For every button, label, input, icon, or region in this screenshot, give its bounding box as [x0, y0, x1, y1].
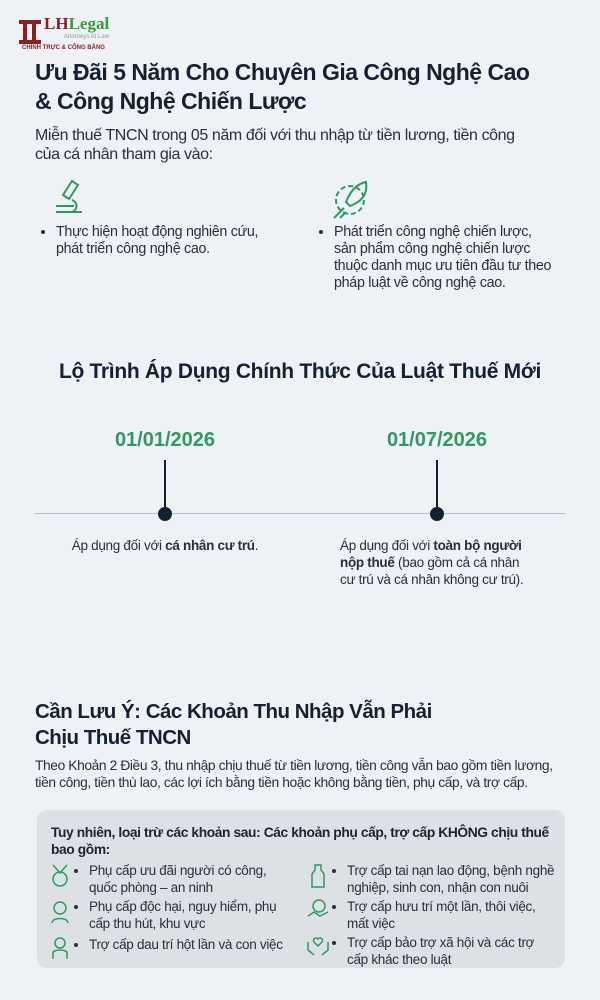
icon: microscope: [56, 180, 82, 213]
right list: nghiệp, sinh con, nhận con nuôi: [347, 880, 528, 895]
intro text: Miễn thuế TNCN trong 05 năm đối với thu nhập từ tiền lương, tiền công: [35, 127, 515, 144]
note 2: Áp dụng đối với toàn bộ người: [340, 538, 522, 553]
left list: cấp thu hút, khu vực: [89, 916, 205, 931]
right list: Trợ cấp tai nạn lao động, bệnh nghề: [347, 863, 554, 878]
section heading: Cần Lưu Ý: Các Khoản Thu Nhập Vẫn Phải: [35, 700, 432, 723]
section text: Theo Khoản 2 Điều 3, thu nhập chịu thuế từ tiền lương, tiền công vẫn bao gồm tiền lương,: [35, 758, 553, 773]
note 1: Áp dụng đối với cá nhân cư trú.: [72, 538, 258, 553]
item 2: [319, 224, 551, 291]
left list: Phụ cấp độc hại, nguy hiểm, phụ: [89, 899, 276, 914]
item 2: Phát triển công nghệ chiến lược,: [334, 224, 532, 240]
right list: Trợ cấp bảo trợ xã hội và các trợ: [347, 935, 534, 950]
item 2: thuộc danh mục ưu tiên đầu tư theo: [334, 258, 551, 274]
item 1: [41, 224, 258, 257]
date 1: 01/01/2026: [115, 429, 215, 451]
intro text: của cá nhân tham gia vào:: [35, 146, 213, 163]
item 1: phát triển công nghệ cao.: [56, 241, 210, 257]
logo: CHÍNH TRỰC & CÔNG BẰNG: [22, 45, 105, 51]
right list: [307, 863, 554, 967]
section heading: [35, 700, 432, 749]
right list: Trợ cấp hưu trí một lần, thôi việc,: [347, 899, 535, 914]
left list: Phụ cấp ưu đãi người có công,: [89, 863, 266, 878]
section text: tiền công, tiền thù lao, các lợi ích bằng tiền hoặc không bằng tiền, phụ cấp, và trợ cấp.: [35, 775, 528, 790]
section heading: Chịu Thuế TNCN: [35, 726, 191, 749]
title: [35, 59, 529, 114]
item 2: sản phẩm công nghệ chiến lược: [334, 241, 530, 257]
item 1: Thực hiện hoạt động nghiên cứu,: [56, 224, 258, 240]
box heading: [51, 824, 550, 857]
box heading: Tuy nhiên, loại trừ các khoản sau: Các khoản phụ cấp, trợ cấp KHÔNG chịu thuế: [51, 825, 549, 840]
logo: LHLegal: [44, 14, 109, 33]
timeline: [35, 429, 565, 587]
left list: quốc phòng – an ninh: [89, 880, 213, 895]
item 2: pháp luật về công nghệ cao.: [334, 275, 506, 291]
icon: rocket gear: [333, 180, 368, 219]
note 2: cư trú và cá nhân không cư trú).: [340, 572, 523, 587]
intro text: [35, 126, 515, 163]
right list: cấp khác theo luật: [347, 952, 451, 967]
left list: Trợ cấp dau trí hột lần và con việc: [89, 937, 283, 952]
exclusion box: [37, 810, 565, 968]
note 2: [340, 538, 523, 587]
box heading: bao gồm:: [51, 842, 110, 857]
right list: mất việc: [347, 916, 395, 931]
note 2: nộp thuế (bao gồm cả cá nhân: [340, 555, 519, 570]
section text: [35, 758, 553, 790]
date 2: 01/07/2026: [387, 429, 487, 451]
title: & Công Nghệ Chiến Lược: [35, 88, 306, 114]
left list: [51, 863, 283, 959]
timeline heading: Lộ Trình Áp Dụng Chính Thức Của Luật Thuế Mới: [59, 360, 541, 383]
logo: Attorneys At Law: [64, 34, 109, 40]
logo: [19, 14, 109, 51]
title: Ưu Đãi 5 Năm Cho Chuyên Gia Công Nghệ Cao: [35, 59, 529, 85]
